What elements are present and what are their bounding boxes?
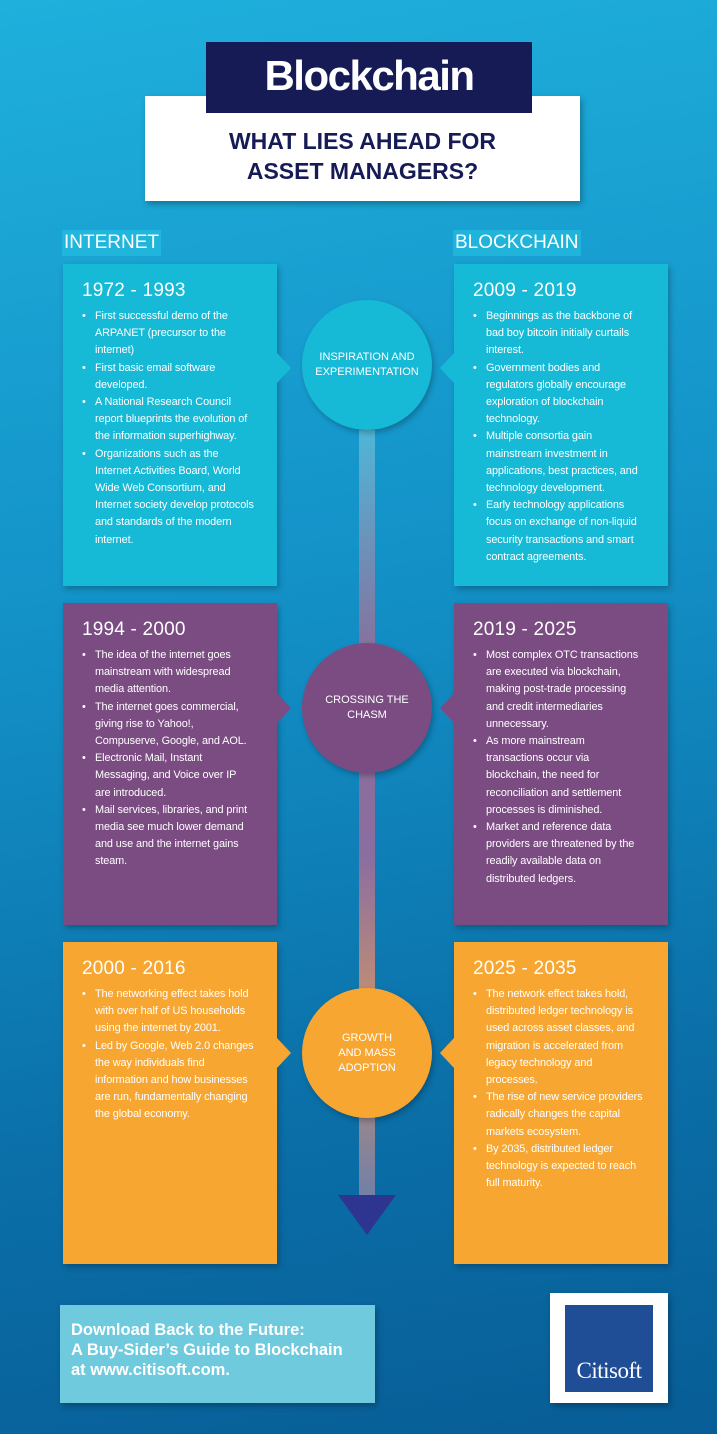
download callout [60, 1305, 375, 1403]
arrowhead [338, 1195, 396, 1235]
title box: Blockchain [206, 42, 532, 113]
panel: 1994-2000: Mail services, libraries, and print media see much lower demand and use and the internet gains steam. [95, 804, 247, 867]
panel: 2009-2019: Beginnings as the backbone of bad boy bitcoin initially curtails interest. [486, 310, 632, 356]
circle: crossing the chasm [302, 643, 432, 773]
pointer [440, 693, 454, 723]
panel: 1972-1993: 1972 - 1993 [82, 280, 186, 301]
panel: 1972-1993: Organizations such as the Internet Activities Board, World Wide Web Consortium, and Internet society develop protocols and standards of the modern internet. [95, 448, 254, 546]
panel: 1994-2000: The internet goes commercial, giving rise to Yahoo!, Compuserve, Google, and AOL. [95, 701, 247, 747]
circle: crossing the chasm: CHASM [347, 709, 387, 721]
panel: 2009-2019: Government bodies and regulators globally encourage exploration of blockchain technology. [486, 362, 626, 425]
panel: 2019-2025: As more mainstream transactions occur via blockchain, the need for reconciliation and settlement processes is diminished. [486, 735, 621, 816]
panel: 2009-2019: Multiple consortia gain mainstream investment in applications, best practices, and technology development. [486, 430, 638, 494]
circle: inspiration: EXPERIMENTATION [315, 366, 419, 378]
circle: inspiration: INSPIRATION AND [319, 351, 415, 363]
title box: Blockchain: Blockchain [264, 52, 474, 99]
panel: 2009-2019: 2009 - 2019 [473, 280, 577, 301]
panel: 2000-2016 [63, 942, 277, 1264]
subtitle box [145, 96, 580, 201]
panel: 2019-2025: Market and reference data providers are threatened by the readily available data on distributed ledgers. [486, 821, 634, 885]
panel: 2025-2035: 2025 - 2035 [473, 958, 577, 979]
circle: growth [302, 988, 432, 1118]
logo: Citisoft: Citisoft [576, 1358, 642, 1383]
panel: 2019-2025 [454, 603, 668, 925]
panel: 2025-2035: By 2035, distributed ledger technology is expected to reach full maturity. [486, 1143, 636, 1189]
pointer [440, 1038, 454, 1068]
download callout: A Buy-Sider’s Guide to Blockchain [71, 1341, 343, 1359]
panel: 1994-2000: The idea of the internet goes mainstream with widespread media attention. [95, 649, 231, 695]
panel: 2000-2016: The networking effect takes hold with over half of US households using the internet by 2001. [95, 988, 248, 1034]
arrow shaft [359, 430, 375, 1205]
circle: growth: AND MASS [338, 1046, 396, 1058]
panel: 1994-2000: Electronic Mail, Instant Messaging, and Voice over IP are introduced. [95, 752, 236, 799]
subtitle box: ASSET MANAGERS? [247, 158, 478, 184]
panel: 1994-2000 [63, 603, 277, 925]
panel: 2000-2016: Led by Google, Web 2.0 changes the way individuals find information and how businesses are run, fundamentally changing the global economy. [95, 1040, 253, 1120]
logo: Citisoft [550, 1293, 668, 1403]
label: blockchain: BLOCKCHAIN [455, 232, 579, 253]
download callout: Download Back to the Future: [71, 1321, 305, 1339]
panel: 2025-2035: The rise of new service providers radically changes the capital markets ecosystem. [486, 1091, 642, 1138]
pointer [277, 693, 291, 723]
circle: growth: ADOPTION [338, 1062, 396, 1074]
panel: 2009-2019 [454, 264, 668, 586]
panel: 1972-1993 [63, 264, 277, 586]
panel: 1972-1993: First basic email software developed. [95, 362, 215, 391]
panel: 2019-2025: 2019 - 2025 [473, 619, 577, 640]
label: internet: INTERNET [64, 232, 159, 253]
circle: inspiration [302, 300, 432, 430]
subtitle box: WHAT LIES AHEAD FOR [229, 128, 496, 154]
panel: 2025-2035 [454, 942, 668, 1264]
pointer [277, 353, 291, 383]
panel: 2000-2016: 2000 - 2016 [82, 958, 186, 979]
pointer [440, 353, 454, 383]
pointer [277, 1038, 291, 1068]
panel: 1972-1993: A National Research Council report blueprints the evolution of the information superhighway. [95, 396, 247, 442]
panel: 2025-2035: The network effect takes hold, distributed ledger technology is used across asset classes, and migration is accelerated from legacy technology and processes. [486, 988, 634, 1086]
download callout: at www.citisoft.com. [71, 1361, 230, 1379]
circle: crossing the chasm: CROSSING THE [325, 694, 409, 706]
panel: 1994-2000: 1994 - 2000 [82, 619, 186, 640]
panel: 2019-2025: Most complex OTC transactions are executed via blockchain, making post-trade processing and credit intermediaries unnecessary. [486, 649, 638, 730]
panel: 2009-2019: Early technology applications focus on exchange of non-liquid security transactions and smart contract agreements. [486, 499, 637, 563]
circle: growth: GROWTH [342, 1032, 392, 1044]
panel: 1972-1993: First successful demo of the ARPANET (precursor to the internet) [95, 310, 228, 356]
